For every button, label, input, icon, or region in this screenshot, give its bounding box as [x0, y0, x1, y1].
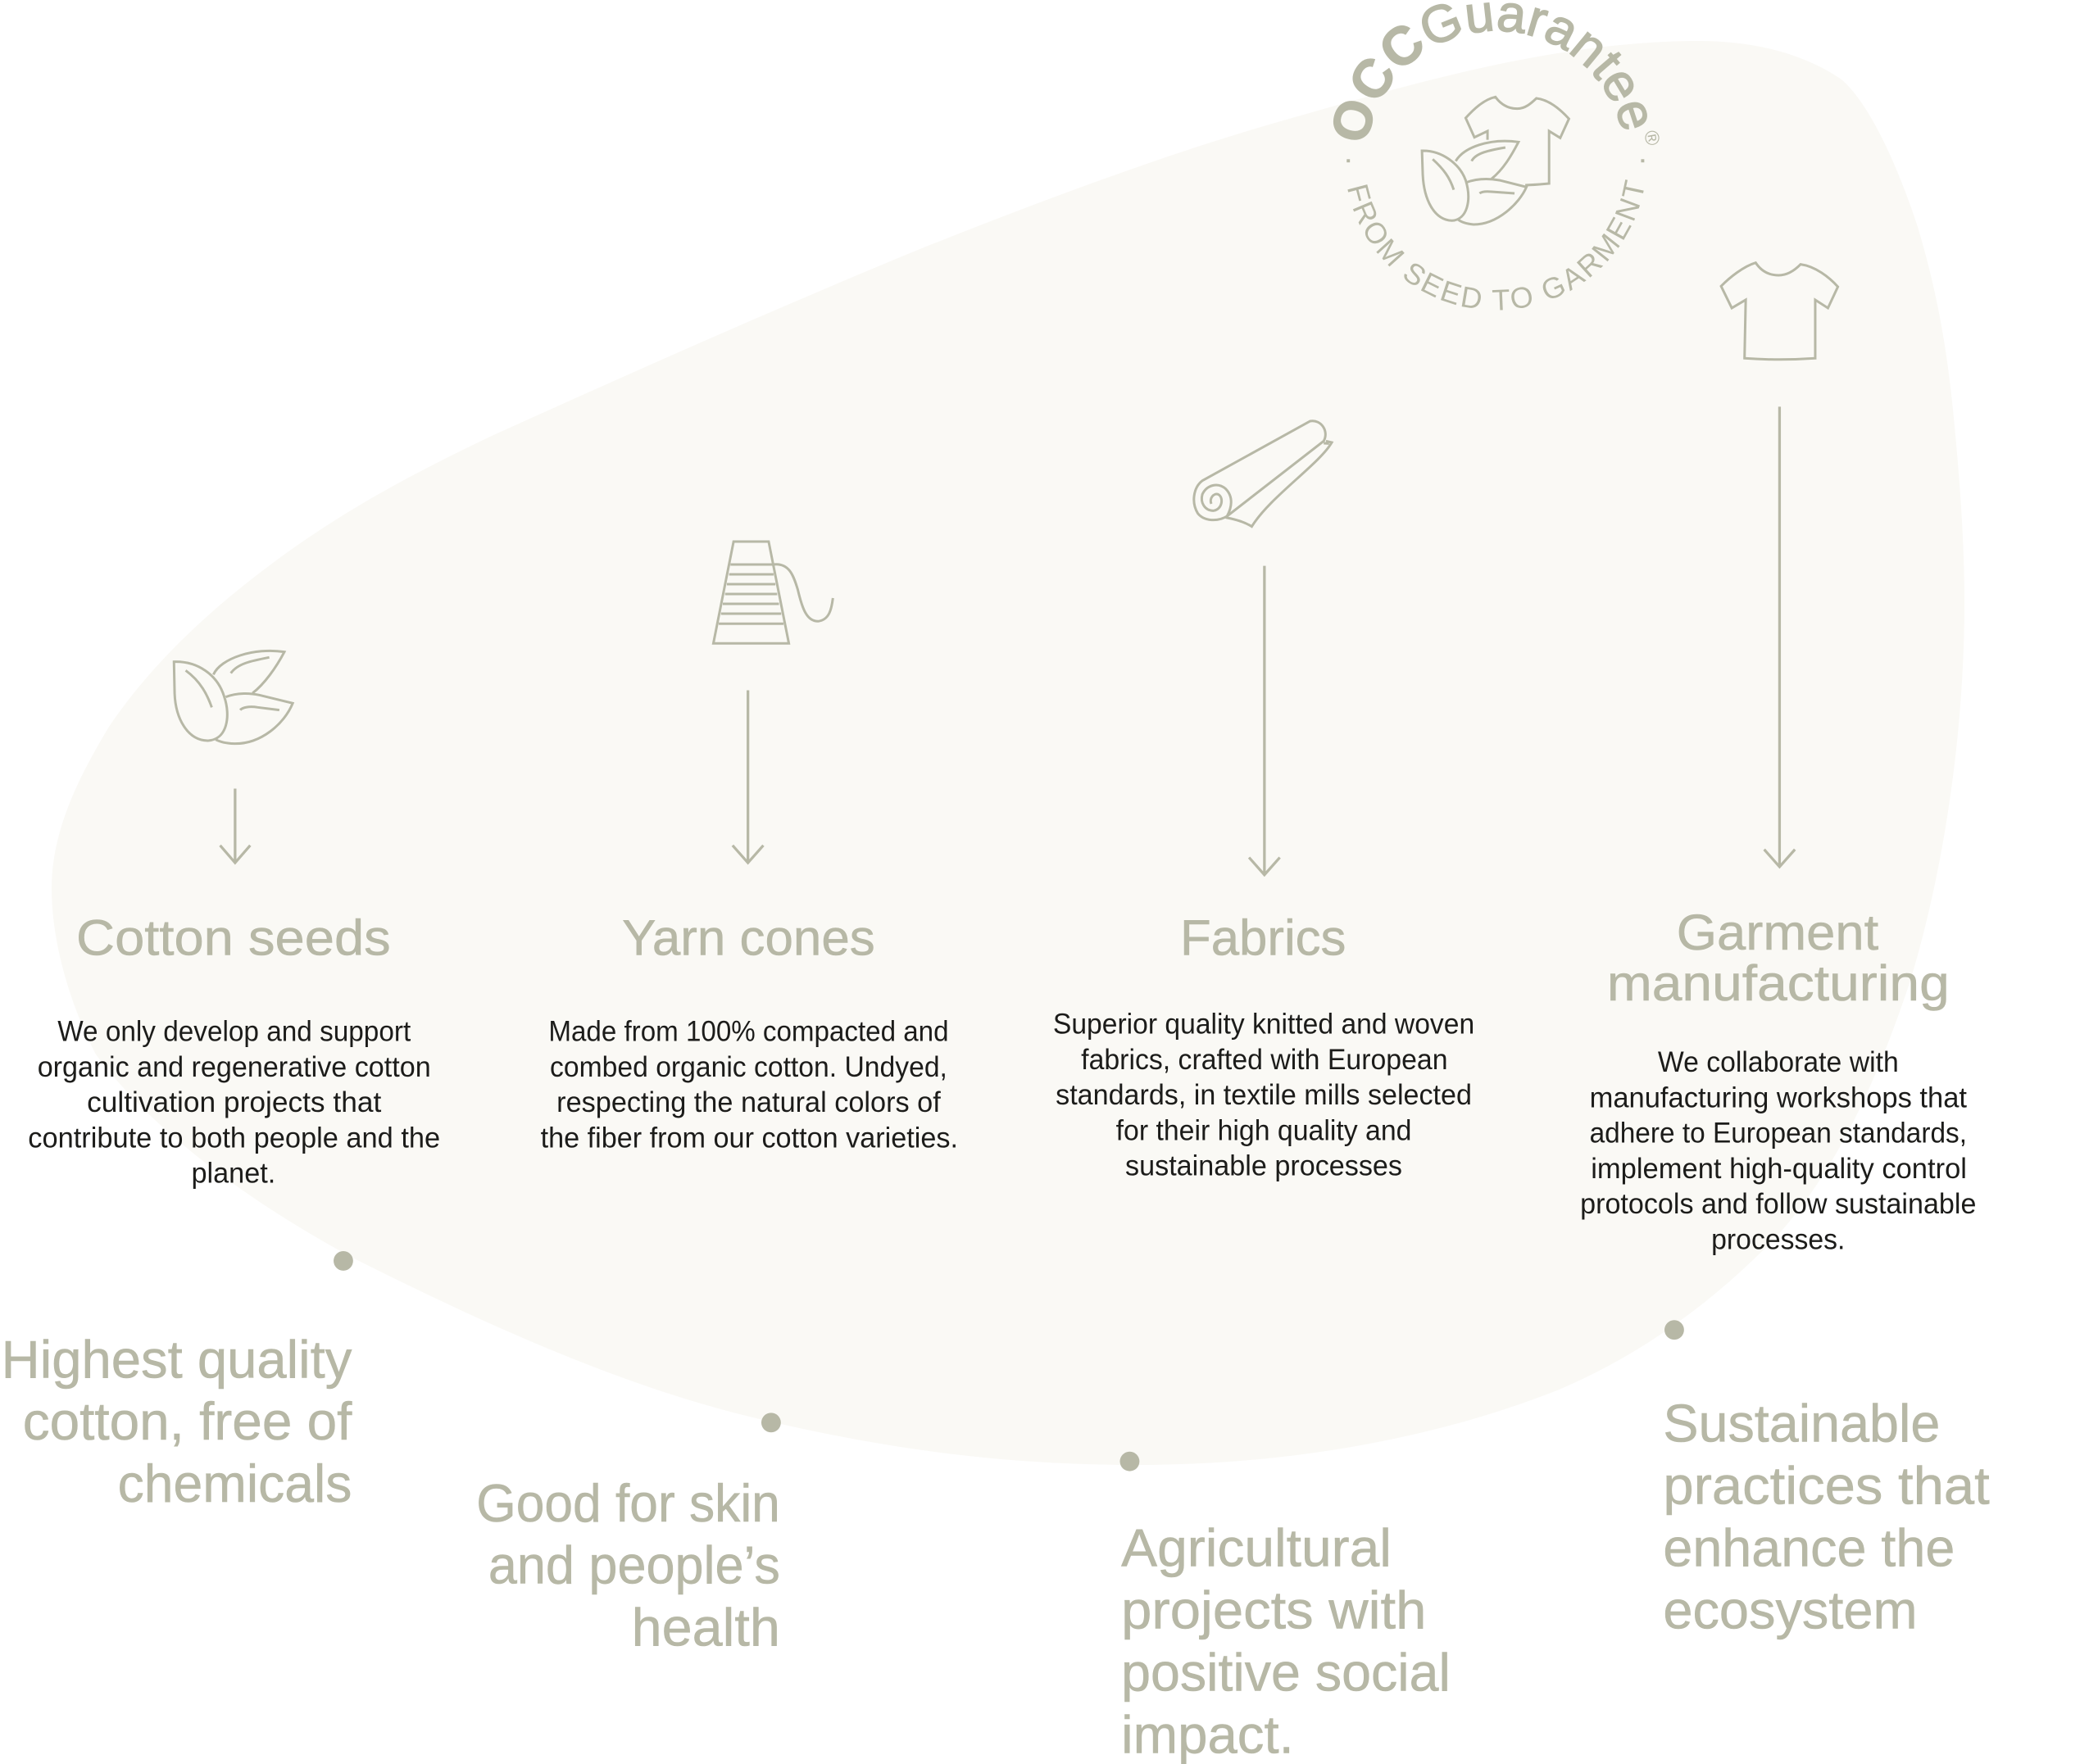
- arrow: garment manufacturing: [1764, 406, 1795, 867]
- benefit: highest quality cotton: chemicals: [118, 1453, 352, 1513]
- description: yarn cones: respecting the natural colors of: [556, 1086, 941, 1118]
- benefit: sustainable practices: ecosystem: [1663, 1580, 1918, 1639]
- heading: garment manufacturing: Garment: [1677, 905, 1878, 960]
- description: fabrics: Superior quality knitted and woven: [1053, 1009, 1474, 1041]
- panel: cotton seeds: [28, 651, 440, 1190]
- benefit: sustainable practices: [1663, 1320, 1990, 1639]
- badge circular title: ®: [1639, 129, 1664, 147]
- description: garment manufacturing: implement high-quality control: [1591, 1153, 1967, 1185]
- benefit: good for skin and health: and people’s: [488, 1535, 780, 1595]
- description: garment manufacturing: We collaborate with: [1658, 1046, 1899, 1078]
- description: cotton seeds: organic and regenerative cotton: [38, 1051, 431, 1083]
- heading: yarn cones: Yarn cones: [622, 910, 875, 966]
- description: garment manufacturing: processes.: [1711, 1223, 1845, 1255]
- badge circular title: [1333, 2, 1664, 310]
- arrow: cotton seeds: [220, 788, 250, 863]
- description: fabrics: fabrics, crafted with European: [1081, 1044, 1448, 1076]
- benefit: sustainable practices: Sustainable: [1663, 1394, 1940, 1453]
- icon: fabric roll: [1194, 421, 1332, 527]
- icon: cotton seeds: [174, 651, 293, 744]
- heading: cotton seeds: Cotton seeds: [76, 910, 391, 966]
- panel: fabrics: [1053, 421, 1474, 1182]
- benefit: highest quality cotton: Highest quality: [2, 1329, 352, 1389]
- description: fabrics: standards, in textile mills selected: [1056, 1079, 1472, 1111]
- description: fabrics: sustainable processes: [1125, 1150, 1402, 1182]
- heading: garment manufacturing: manufacturing: [1607, 955, 1950, 1011]
- description: yarn cones: [541, 1016, 958, 1154]
- benefit: agricultural projects with social impact: positive social: [1121, 1642, 1451, 1702]
- heading: garment manufacturing: [1607, 905, 1950, 1011]
- description: garment manufacturing: manufacturing workshops that: [1590, 1082, 1967, 1113]
- description: yarn cones: combed organic cotton. Undyed,: [550, 1051, 947, 1083]
- description: garment manufacturing: [1580, 1046, 1976, 1255]
- benefit: agricultural projects with social impact: Agricultural: [1121, 1518, 1392, 1578]
- panel: garment manufacturing: [1580, 263, 1976, 1255]
- icon: badge t-shirt and seeds: [1422, 97, 1569, 224]
- benefit: good for skin and health: health: [632, 1598, 780, 1657]
- arrow: yarn cones: [733, 690, 763, 863]
- description: fabrics: for their high quality and: [1116, 1114, 1411, 1146]
- description: cotton seeds: cultivation projects that: [87, 1086, 382, 1118]
- icon: t-shirt: [1721, 263, 1838, 360]
- benefit: highest quality cotton: cotton, free of: [23, 1391, 352, 1451]
- description: fabrics: [1053, 1009, 1474, 1182]
- description: yarn cones: the fiber from our cotton varieties.: [541, 1122, 958, 1154]
- benefit: highest quality cotton: [2, 1251, 353, 1513]
- benefit: good for skin and health: Good for skin: [476, 1473, 780, 1533]
- heading: fabrics: Fabrics: [1180, 910, 1346, 966]
- description: yarn cones: Made from 100% compacted and: [548, 1016, 949, 1048]
- icon: yarn cone: [713, 542, 833, 643]
- panel: yarn cones: [541, 542, 958, 1154]
- description: cotton seeds: contribute to both people and the: [28, 1122, 440, 1154]
- badge: OCC Guarantee from seed to garment: [1333, 2, 1664, 310]
- benefit: agricultural projects with social impact: projects with: [1121, 1580, 1426, 1639]
- background blob: [52, 41, 1964, 1465]
- benefit: agricultural projects with social impact: impact.: [1121, 1704, 1294, 1764]
- benefit: sustainable practices: enhance the: [1663, 1518, 1955, 1578]
- description: garment manufacturing: adhere to European standards,: [1590, 1118, 1967, 1150]
- description: cotton seeds: planet.: [191, 1158, 275, 1190]
- benefit: sustainable practices: practices that: [1663, 1456, 1990, 1516]
- arrow: fabrics: [1249, 566, 1280, 875]
- description: garment manufacturing: protocols and follow sustainable: [1580, 1188, 1976, 1220]
- benefit: agricultural projects with social impact: [1120, 1452, 1451, 1764]
- benefit: good for skin and health: [476, 1413, 781, 1657]
- description: cotton seeds: We only develop and support: [57, 1016, 411, 1048]
- description: cotton seeds: [28, 1016, 440, 1190]
- badge circular title: FROM SEED TO GARMENT: [1347, 179, 1644, 310]
